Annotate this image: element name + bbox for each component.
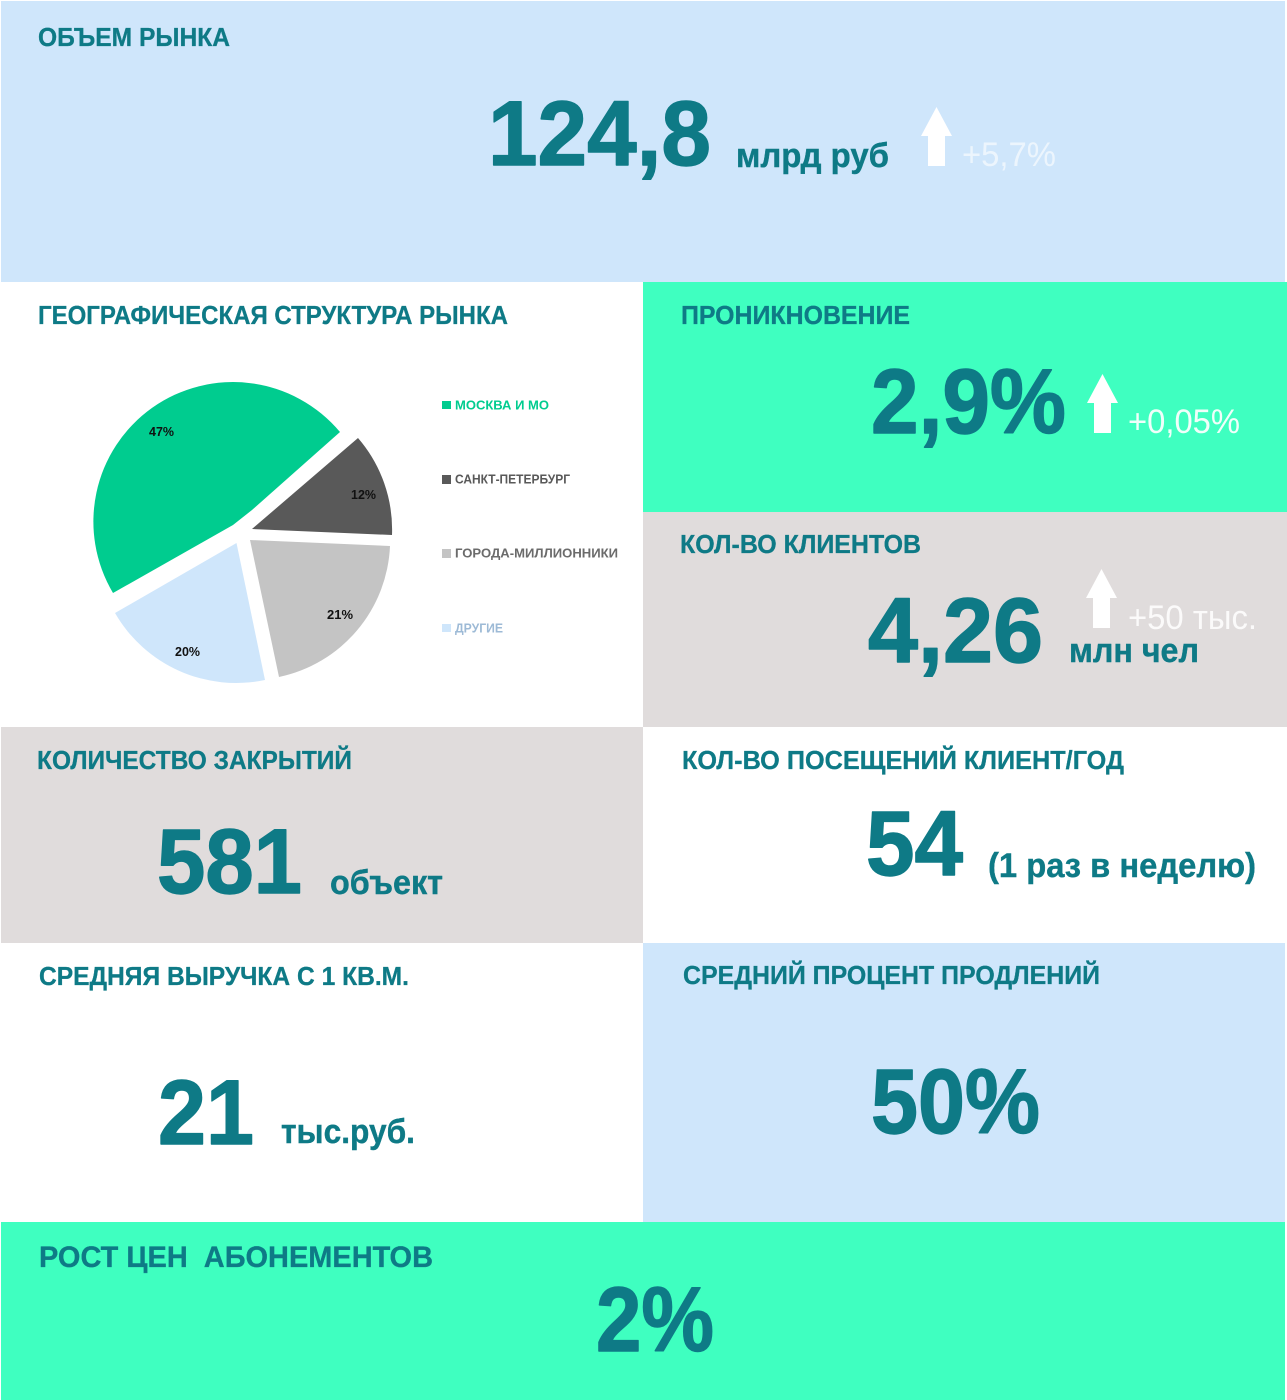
icon: up arrow [921, 107, 952, 166]
slice: million-plus cities 21% [250, 540, 390, 677]
slice: Moscow 47% [93, 382, 340, 593]
panel: renewal rate [643, 943, 1285, 1222]
value: closures: 581 [157, 811, 302, 913]
heading: revenue: СРЕДНЯЯ ВЫРУЧКА С 1 КВ.М. [39, 961, 409, 991]
value: visits: 54 [866, 793, 963, 895]
value: clients: 4,26 [868, 580, 1043, 682]
panel: market size [1, 1, 1285, 282]
unit: billion rubles: млрд руб [736, 137, 889, 175]
value: price growth: 2% [596, 1269, 714, 1371]
heading: renewal rate: СРЕДНИЙ ПРОЦЕНТ ПРОДЛЕНИЙ [683, 960, 1100, 990]
pie chart [93, 382, 392, 683]
legend item: million-plus cities: ГОРОДА-МИЛЛИОННИКИ [455, 546, 618, 560]
panel: clients [643, 512, 1287, 727]
unit: thousand rubles: тыс.руб. [281, 1113, 415, 1151]
panel: closures [1, 727, 643, 943]
heading: closures: КОЛИЧЕСТВО ЗАКРЫТИЙ [37, 745, 352, 775]
label: 20%: 20% [175, 645, 200, 659]
panel: visits per client [643, 727, 1287, 943]
value: market size: 124,8 [488, 83, 711, 185]
icon: up arrow [1087, 374, 1118, 433]
panel: penetration [643, 282, 1287, 512]
slice: other 20% [115, 543, 265, 683]
unit: million people: млн чел [1069, 632, 1199, 670]
change: penetration: +0,05% [1128, 403, 1240, 441]
heading: visits: КОЛ-ВО ПОСЕЩЕНИЙ КЛИЕНТ/ГОД [682, 745, 1124, 775]
value: revenue: 21 [158, 1062, 254, 1164]
value: renewal rate: 50% [871, 1051, 1040, 1153]
legend item: other: ДРУГИЕ [455, 620, 503, 636]
label: 47%: 47% [149, 425, 174, 439]
legend item: Moscow: МОСКВА И МО [455, 398, 549, 412]
icon: up arrow [1086, 569, 1117, 628]
change: clients: +50 тыс. [1128, 599, 1257, 637]
heading: penetration: ПРОНИКНОВЕНИЕ [681, 300, 910, 330]
unit: objects: объект [330, 864, 443, 902]
value: penetration: 2,9% [871, 351, 1066, 453]
label: 21%: 21% [327, 608, 353, 622]
heading: market size: ОБЪЕМ РЫНКА [38, 22, 230, 52]
legend item: Saint Petersburg: САНКТ-ПЕТЕРБУРГ [455, 472, 571, 486]
heading: geographic structure: ГЕОГРАФИЧЕСКАЯ СТРУКТУРА РЫНКА [38, 300, 508, 330]
change: market size: +5,7% [962, 136, 1056, 174]
heading: price growth: РОСТ ЦЕН АБОНЕМЕНТОВ [39, 1241, 433, 1274]
panel: geographic structure [0, 282, 643, 727]
label: 12%: 12% [351, 488, 376, 502]
slice: Saint Petersburg 12% [252, 438, 392, 535]
panel: revenue per sq m [0, 943, 643, 1222]
heading: clients: КОЛ-ВО КЛИЕНТОВ [680, 529, 921, 559]
note: once a week: (1 раз в неделю) [988, 847, 1256, 885]
panel: price growth [1, 1222, 1285, 1400]
legend [442, 398, 618, 636]
